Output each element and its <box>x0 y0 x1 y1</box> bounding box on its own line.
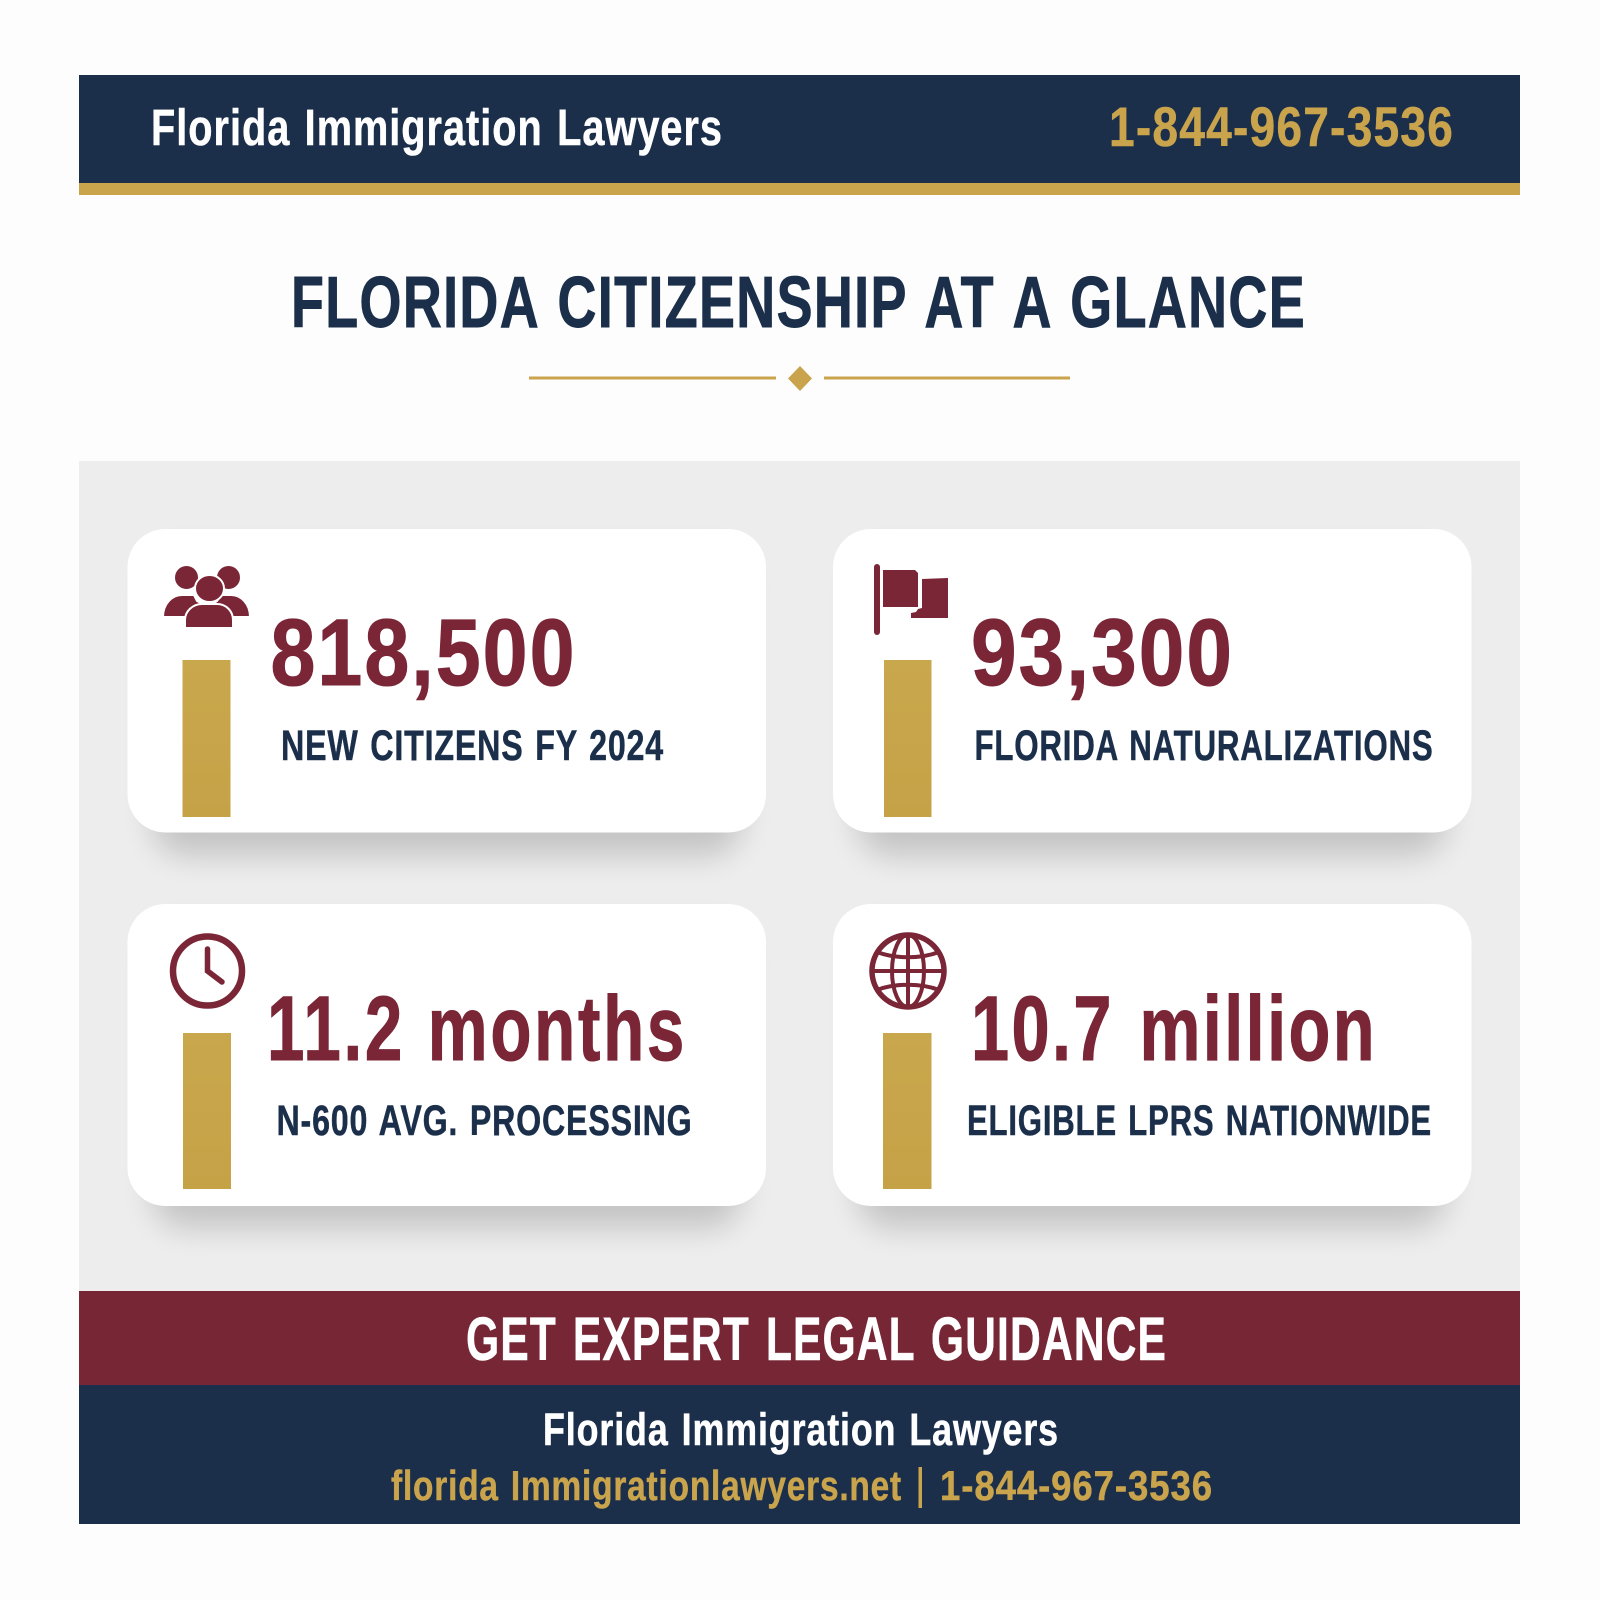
gold bar <box>182 660 230 817</box>
icon: flag <box>874 564 948 635</box>
footer contact line: 1-844-967-3536 <box>940 1462 1213 1509</box>
icon: people <box>163 565 250 628</box>
gold bar <box>883 1033 932 1189</box>
label: FLORIDA NATURALIZATIONS <box>974 722 1434 770</box>
header firm name: Florida Immigration Lawyers <box>151 99 723 156</box>
stat card: new citizens <box>128 529 766 856</box>
footer band <box>79 1385 1520 1524</box>
stat card: Florida naturalizations <box>833 529 1472 856</box>
title divider with diamond <box>529 366 1070 391</box>
value: 93,300 <box>971 600 1234 706</box>
gold bar <box>183 1033 231 1189</box>
call-to-action text: GET EXPERT LEGAL GUIDANCE <box>466 1305 1167 1373</box>
footer firm name: Florida Immigration Lawyers <box>543 1404 1059 1455</box>
header phone number: 1-844-967-3536 <box>1109 95 1454 158</box>
icon: clock <box>173 936 242 1006</box>
stat card: eligible LPRs <box>833 904 1472 1228</box>
stat card: N-600 processing <box>128 904 766 1228</box>
gold bar <box>884 660 932 817</box>
footer contact line: florida Immigrationlawyers.net <box>391 1462 902 1509</box>
label: NEW CITIZENS FY 2024 <box>281 722 664 770</box>
value: 818,500 <box>270 600 576 706</box>
call-to-action band <box>79 1291 1520 1385</box>
icon: globe <box>872 935 944 1007</box>
label: ELIGIBLE LPRS NATIONWIDE <box>967 1097 1432 1145</box>
header band <box>79 75 1520 195</box>
label: N-600 AVG. PROCESSING <box>276 1097 692 1145</box>
value: 10.7 million <box>971 978 1377 1080</box>
stats panel background <box>79 461 1520 1291</box>
value: 11.2 months <box>267 978 687 1080</box>
